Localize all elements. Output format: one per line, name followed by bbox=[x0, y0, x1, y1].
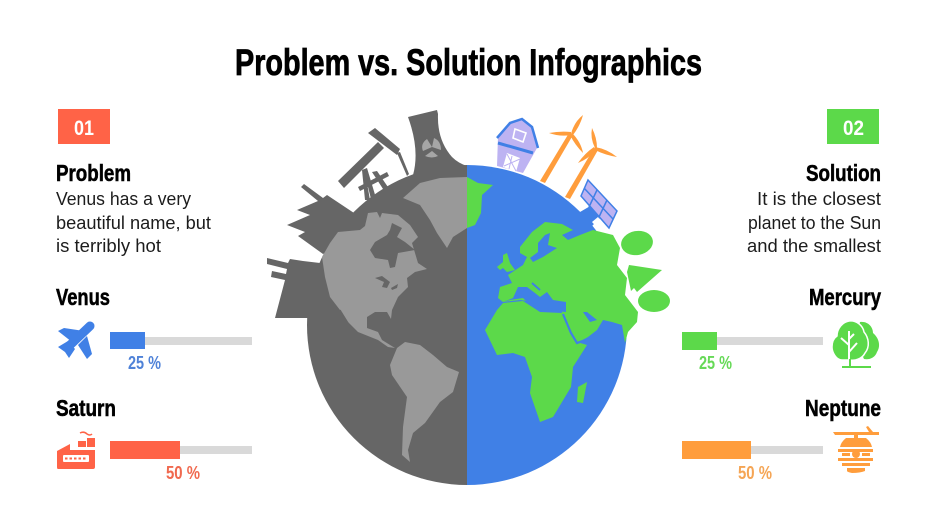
badge 02 bbox=[827, 109, 879, 144]
continent: greenland left bbox=[403, 177, 467, 248]
mercury progress bar bbox=[682, 332, 823, 350]
panel: problem bbox=[56, 109, 211, 256]
persian gulf bbox=[583, 312, 597, 322]
continent: north america bbox=[322, 212, 427, 348]
panel: venus metric bbox=[56, 284, 252, 373]
baltic sea bbox=[530, 233, 557, 262]
saturn label: Saturn bbox=[56, 395, 116, 421]
hudson bay bbox=[370, 223, 415, 268]
icon: power plant silhouette bbox=[267, 258, 320, 318]
panel: mercury metric bbox=[682, 284, 881, 373]
gulf of california bbox=[340, 310, 348, 323]
panel: saturn metric bbox=[56, 395, 252, 483]
icon: factory bbox=[57, 432, 95, 469]
icon: airplane bbox=[58, 326, 92, 359]
solution description: It is the closest bbox=[757, 189, 881, 209]
continent: madagascar bbox=[577, 382, 587, 403]
icon: trees bbox=[832, 321, 879, 367]
panel: neptune metric bbox=[682, 395, 881, 483]
icon: wind turbine right bbox=[565, 128, 617, 199]
problem description: beautiful name, but bbox=[56, 213, 211, 233]
neptune percent: 50 % bbox=[738, 463, 772, 483]
icon: solar panel bbox=[575, 180, 617, 231]
saturn percent: 50 % bbox=[166, 463, 200, 483]
icon: wind turbine left bbox=[540, 115, 583, 183]
mercury label: Mercury bbox=[809, 284, 881, 310]
venus percent: 25 % bbox=[128, 353, 161, 373]
healthy half of earth bbox=[467, 165, 627, 485]
neptune progress bar bbox=[682, 441, 823, 459]
saturn progress bar bbox=[110, 441, 252, 459]
continent: eurasia bbox=[498, 222, 638, 343]
adriatic sea bbox=[532, 283, 540, 290]
problem description: is terribly hot bbox=[56, 236, 161, 256]
icon: tree right bottom bbox=[638, 290, 670, 312]
continent: south america bbox=[390, 342, 459, 462]
icon: barn bbox=[497, 118, 538, 173]
icon: tree right top bbox=[619, 228, 655, 258]
mediterranean sea bbox=[503, 287, 566, 312]
solution heading: Solution bbox=[806, 160, 881, 186]
icon: cooling tower bbox=[408, 110, 467, 185]
solution description bbox=[747, 189, 881, 256]
neptune label: Neptune bbox=[805, 395, 881, 421]
great lakes bbox=[375, 276, 398, 290]
problem description: Venus has a very bbox=[56, 189, 191, 209]
continent: greenland right bbox=[467, 177, 493, 228]
venus progress bar bbox=[110, 332, 252, 349]
continent: united kingdom bbox=[497, 253, 515, 272]
icon: factory silhouette bbox=[287, 184, 360, 254]
badge 01 bbox=[58, 109, 110, 144]
title: Problem vs. Solution Infographics bbox=[235, 42, 702, 83]
red sea bbox=[563, 314, 588, 343]
venus label: Venus bbox=[56, 284, 110, 310]
problem description bbox=[56, 189, 211, 256]
badge 02: 02 bbox=[843, 117, 864, 140]
solution description: planet to the Sun bbox=[748, 213, 881, 233]
continent: africa bbox=[485, 301, 587, 422]
icon: oil pump jack bbox=[338, 128, 409, 200]
icon: pine tree right bbox=[627, 265, 662, 292]
chart: globe illustration bbox=[267, 110, 670, 485]
solution description: and the smallest bbox=[747, 236, 881, 256]
badge 01: 01 bbox=[74, 117, 94, 140]
icon: beehive bbox=[833, 426, 879, 473]
mercury percent: 25 % bbox=[699, 353, 732, 373]
panel: solution bbox=[747, 109, 881, 256]
problem heading: Problem bbox=[56, 160, 131, 186]
polluted half of earth bbox=[307, 165, 467, 485]
